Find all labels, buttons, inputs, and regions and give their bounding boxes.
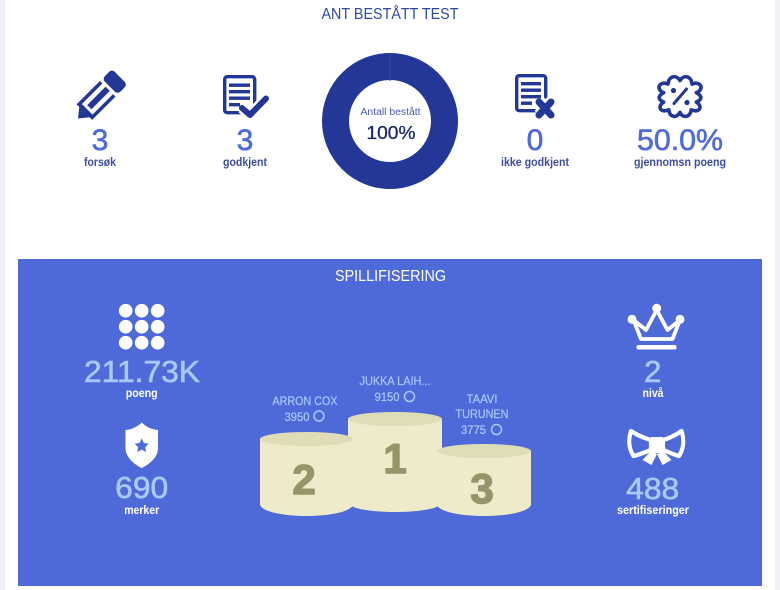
icon: crown — [628, 304, 684, 350]
stat: forsøk: forsøk — [84, 157, 117, 169]
label: Arron Cox — [272, 394, 338, 424]
label: Jukka Laih: 9150 — [374, 390, 400, 404]
stat: merker: 690 — [115, 470, 168, 505]
donut chart: antall bestått: Antall bestått — [360, 106, 421, 118]
donut chart: antall bestått: 100% — [366, 123, 416, 143]
icon: dot grid — [119, 304, 164, 350]
icon: document with cross — [517, 76, 552, 115]
stat: merker — [115, 422, 168, 517]
stat: ikke godkjent — [501, 76, 569, 169]
panel: spillifisering — [18, 259, 762, 586]
stat: sertifiseringer: sertifiseringer — [617, 505, 689, 517]
podium: third place — [437, 444, 531, 516]
label: Arron Cox: 3950 — [284, 410, 310, 424]
podium: first place: 1 — [383, 435, 407, 482]
stat: nivå: nivå — [642, 388, 664, 400]
stat: gjennomsnitt poeng: 50.0% — [637, 124, 723, 157]
stat: nivå — [628, 304, 684, 400]
heading: spillifisering: SPILLIFISERING — [335, 268, 446, 285]
stat: gjennomsnitt poeng: gjennomsn poeng — [634, 157, 726, 169]
stat: ikke godkjent: ikke godkjent — [501, 157, 569, 169]
label: Jukka Laih: JUKKA LAIH... — [360, 374, 430, 388]
label: Taavi Turunen: TURUNEN — [456, 407, 508, 421]
icon: shield with star — [126, 422, 158, 468]
podium: third place: 3 — [470, 465, 494, 512]
label: Arron Cox: ARRON COX — [272, 394, 338, 408]
title: ant bestått test: ANT BESTÅTT TEST — [322, 4, 459, 23]
stat: gjennomsnitt poeng — [634, 77, 726, 169]
podium: second place — [260, 432, 353, 516]
donut chart: antall bestått — [336, 53, 444, 176]
stat: forsøk — [70, 69, 127, 169]
podium: second place: 2 — [292, 456, 316, 503]
icon: document with check — [225, 77, 266, 115]
stat: poeng: poeng — [126, 388, 158, 400]
stat: merker: merker — [124, 505, 160, 517]
stat: poeng — [84, 304, 200, 400]
label: Taavi Turunen: TAAVI — [466, 392, 498, 406]
icon: bow — [629, 431, 683, 465]
stat: poeng: 211.73K — [84, 354, 200, 389]
label: Taavi Turunen: 3775 — [461, 423, 486, 437]
stat: godkjent: godkjent — [223, 157, 267, 169]
stat: ikke godkjent: 0 — [527, 124, 543, 157]
podium: first place — [348, 412, 442, 512]
icon: pencil — [70, 69, 127, 126]
stat: godkjent: 3 — [237, 124, 253, 157]
stat: godkjent — [223, 77, 267, 169]
label: Jukka Laih — [360, 374, 430, 404]
stat: sertifiseringer: 488 — [626, 471, 679, 506]
stat: sertifiseringer — [617, 431, 689, 517]
podium chart — [260, 374, 531, 516]
stat: forsøk: 3 — [92, 124, 108, 157]
stat: nivå: 2 — [644, 354, 661, 389]
icon: percent badge — [659, 77, 701, 116]
label: Taavi Turunen — [456, 392, 508, 437]
